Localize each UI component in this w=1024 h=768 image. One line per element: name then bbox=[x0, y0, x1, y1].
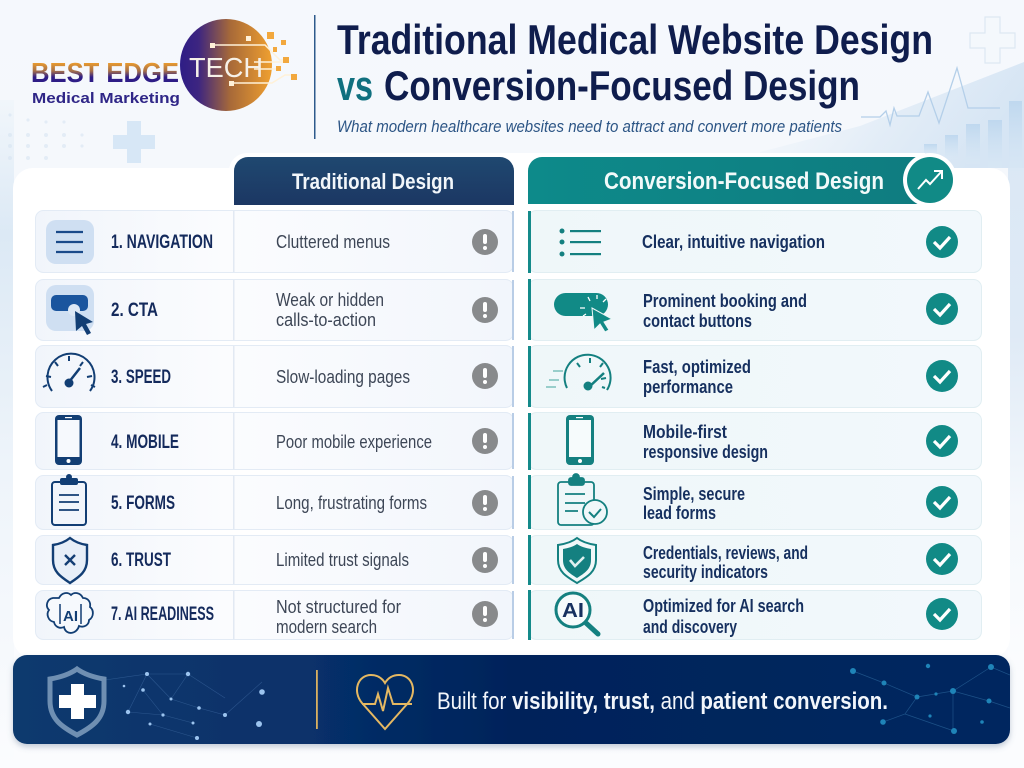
row 7: ai readiness bbox=[36, 590, 982, 640]
row 3 conversion text: Fast, optimized bbox=[643, 357, 751, 377]
warning icon bbox=[472, 490, 498, 516]
icon: shield with x bbox=[53, 538, 87, 583]
banner divider bbox=[316, 670, 318, 729]
row 7 traditional text bbox=[276, 597, 401, 637]
row 2 left panel bbox=[36, 280, 514, 340]
check icon bbox=[926, 425, 958, 457]
icon: growth arrow badge bbox=[903, 153, 957, 207]
row 2 traditional text bbox=[276, 290, 384, 330]
icon: ai brain bbox=[47, 593, 93, 633]
warning icon bbox=[472, 229, 498, 255]
icon: phone bbox=[55, 415, 82, 465]
check icon bbox=[926, 598, 958, 630]
row 2 traditional text: Weak or hidden bbox=[276, 290, 384, 310]
check icon bbox=[926, 486, 958, 518]
row 3 traditional text: Slow-loading pages bbox=[276, 367, 410, 387]
icon: ai brain: AI bbox=[63, 608, 78, 625]
decorative medical cross, top right bbox=[970, 17, 1015, 63]
row 2 label: 2. CTA bbox=[111, 300, 158, 321]
warning icon bbox=[472, 601, 498, 627]
icon: ai magnifier bbox=[556, 593, 598, 634]
row 2 conversion text bbox=[643, 291, 807, 331]
decorative chart and pulse line bbox=[861, 68, 1022, 171]
row 6 conversion text bbox=[643, 543, 808, 582]
row 3 left panel bbox=[36, 346, 514, 408]
title line 2: Conversion-Focused Design bbox=[384, 62, 860, 109]
icon: clipboard bbox=[52, 474, 86, 525]
row 5 conversion text: lead forms bbox=[643, 503, 716, 523]
row 2 traditional text: calls-to-action bbox=[276, 310, 376, 330]
decorative medical cross, left bbox=[113, 121, 155, 163]
icon: button and cursor bbox=[46, 285, 94, 335]
icon: shield with cross bbox=[50, 669, 104, 735]
row 3 conversion text: performance bbox=[643, 377, 733, 397]
title bbox=[337, 16, 933, 109]
row 7 conversion text: Optimized for AI search bbox=[643, 596, 804, 616]
icon: clipboard with check bbox=[558, 474, 607, 525]
column header: conversion-focused design bbox=[528, 153, 957, 207]
row 7 left panel bbox=[36, 590, 514, 640]
row 7 traditional text: Not structured for bbox=[276, 597, 401, 617]
logo circle bbox=[180, 19, 272, 111]
row 3: speed bbox=[36, 346, 982, 408]
row 2: cta bbox=[36, 279, 982, 340]
column header: traditional design bbox=[234, 157, 514, 205]
row 4: mobile bbox=[36, 412, 982, 470]
main white panel bbox=[13, 168, 1010, 658]
row 6 conversion text: Credentials, reviews, and bbox=[643, 543, 808, 563]
subtitle: What modern healthcare websites need to attract and convert more patients bbox=[337, 117, 842, 136]
row 7 conversion text bbox=[643, 596, 804, 637]
row 5 conversion text bbox=[643, 484, 745, 523]
row 6 right panel bbox=[528, 536, 982, 584]
check icon bbox=[926, 543, 958, 575]
row 6: trust bbox=[36, 535, 982, 585]
row 6 label: 6. TRUST bbox=[111, 550, 171, 571]
row 6 traditional text: Limited trust signals bbox=[276, 550, 409, 570]
title line 1: Traditional Medical Website Design bbox=[337, 16, 933, 63]
row 3 conversion text bbox=[643, 357, 751, 397]
check icon bbox=[926, 226, 958, 258]
row 3 right panel bbox=[528, 346, 982, 408]
row 5 label: 5. FORMS bbox=[111, 493, 175, 514]
left network pattern bbox=[105, 672, 265, 740]
row 5: forms bbox=[36, 474, 982, 530]
warning icon bbox=[472, 363, 498, 389]
warning icon bbox=[472, 547, 498, 573]
row 2 conversion text: Prominent booking and bbox=[643, 291, 807, 311]
row 2 conversion text: contact buttons bbox=[643, 311, 752, 331]
column header: traditional design: Traditional Design bbox=[292, 169, 454, 194]
icon: list bbox=[560, 228, 601, 256]
icon: ai magnifier: AI bbox=[562, 600, 584, 622]
row 1 traditional text: Cluttered menus bbox=[276, 232, 390, 252]
row 4 conversion text: Mobile-first bbox=[643, 422, 727, 442]
logo word BEST EDGE: BEST EDGE bbox=[31, 57, 179, 88]
row 1 conversion text: Clear, intuitive navigation bbox=[642, 232, 825, 252]
icon: heart with pulse bbox=[357, 675, 413, 729]
logo tagline: Medical Marketing bbox=[32, 90, 180, 107]
warning icon bbox=[472, 428, 498, 454]
row 1 left panel bbox=[36, 210, 514, 272]
row 1 right panel bbox=[528, 210, 982, 272]
bottom banner bbox=[13, 655, 1010, 744]
icon: shield with check bbox=[558, 538, 596, 583]
row 7 conversion text: and discovery bbox=[643, 617, 737, 637]
header tab halo bbox=[229, 153, 925, 205]
row 7 traditional text: modern search bbox=[276, 617, 377, 637]
title word vs: vs bbox=[337, 62, 373, 109]
warning icon bbox=[472, 297, 498, 323]
check icon bbox=[926, 293, 958, 325]
icon: speedometer bbox=[43, 354, 95, 391]
logo circuit squares bbox=[210, 32, 297, 86]
row 4 left panel bbox=[36, 412, 514, 470]
check icon bbox=[926, 360, 958, 392]
row 4 conversion text: responsive design bbox=[643, 442, 768, 462]
icon: menu bbox=[46, 220, 94, 264]
icon: phone teal bbox=[566, 415, 594, 465]
column header: conversion-focused design: Conversion-Focused Design bbox=[604, 168, 884, 195]
icon: booking button and cursor bbox=[554, 293, 612, 332]
row 5 traditional text: Long, frustrating forms bbox=[276, 493, 427, 513]
logo word TECH: TECH bbox=[189, 52, 263, 83]
row 1 label: 1. NAVIGATION bbox=[111, 232, 213, 253]
right network pattern bbox=[850, 664, 1010, 734]
row 6 left panel bbox=[36, 536, 514, 584]
header divider bbox=[314, 15, 316, 139]
row 4 label: 4. MOBILE bbox=[111, 432, 179, 453]
row 2 right panel bbox=[528, 280, 982, 340]
logo bbox=[31, 19, 297, 111]
row 4 right panel bbox=[528, 412, 982, 470]
icon: fast speedometer bbox=[546, 355, 611, 390]
row 4 traditional text: Poor mobile experience bbox=[276, 432, 432, 452]
row 4 conversion text bbox=[643, 422, 768, 462]
row 5 conversion text: Simple, secure bbox=[643, 484, 745, 504]
row 7 label: 7. AI READINESS bbox=[111, 604, 214, 625]
banner message: Built for visibility, trust, and patient conversion. bbox=[437, 688, 888, 715]
row 1: navigation bbox=[36, 210, 982, 273]
logo circuit traces bbox=[212, 45, 293, 83]
row 7 right panel bbox=[528, 590, 982, 640]
row 5 left panel bbox=[36, 476, 514, 530]
row 5 right panel bbox=[528, 476, 982, 530]
row 3 label: 3. SPEED bbox=[111, 367, 171, 388]
row 6 conversion text: security indicators bbox=[643, 562, 768, 582]
banner background bbox=[13, 655, 1010, 744]
